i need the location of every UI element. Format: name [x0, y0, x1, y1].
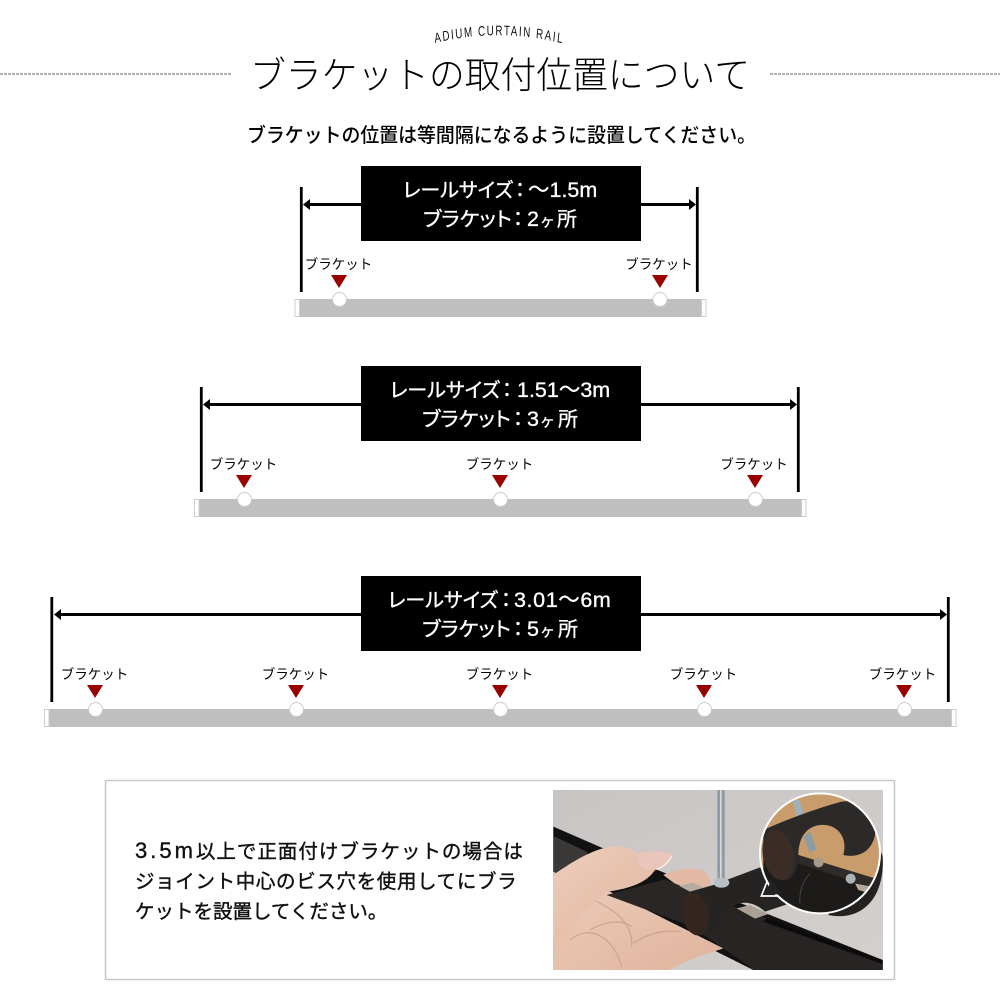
- header: arched English label: ADIUM CURTAIN RAIL: [434, 26, 562, 44]
- note text: ジョイント中心のビス穴を使用してにブラ: [135, 870, 517, 893]
- title: ブラケットの取付位置について: [250, 55, 750, 96]
- label box: レールサイズ: [388, 589, 499, 612]
- bracket markers: ブラケット: [466, 456, 533, 472]
- diagram: rail up to 1.5m: [295, 166, 706, 317]
- label box: 2: [527, 207, 539, 231]
- diagram: rail 3.01 to 6m: [44, 576, 956, 727]
- second finger: [663, 869, 710, 890]
- label box: ヶ: [541, 413, 553, 430]
- label box: 1.51～3m: [517, 378, 610, 402]
- rail bar: [44, 709, 956, 727]
- label box: ブラケット: [422, 407, 511, 431]
- rail bar: [295, 299, 706, 317]
- bracket: [690, 867, 786, 912]
- inset callout: [757, 790, 883, 920]
- label box: ヶ: [541, 213, 553, 230]
- bracket markers: ブラケット: [61, 666, 128, 682]
- panel: joint note: [106, 780, 894, 980]
- label box: 所: [558, 618, 578, 641]
- bracket markers: ブラケット: [625, 256, 693, 272]
- rail clips: [679, 883, 703, 893]
- bracket markers: ブラケット: [305, 256, 372, 272]
- note text: ケットを設置してください。: [135, 901, 387, 923]
- label box: ブラケット: [423, 207, 512, 231]
- bracket markers: ブラケット: [670, 666, 737, 682]
- label box: ：: [513, 619, 523, 641]
- bracket markers: ブラケット: [869, 666, 936, 682]
- bracket markers: ブラケット: [720, 456, 788, 472]
- tube: [607, 879, 883, 972]
- label box: レールサイズ: [390, 379, 501, 402]
- label box: [361, 366, 641, 441]
- bracket markers: ブラケット: [210, 456, 277, 472]
- label box: [361, 166, 641, 241]
- label box: ：: [515, 180, 525, 202]
- subtitle: ブラケットの位置は等間隔になるように設置してください。: [247, 123, 756, 147]
- label box: ～1.5m: [528, 178, 597, 202]
- label box: [361, 576, 641, 651]
- label box: 3.01～6m: [514, 588, 611, 612]
- bracket markers: ブラケット: [262, 666, 329, 682]
- label box: 所: [557, 208, 577, 231]
- label box: ：: [513, 209, 523, 231]
- label box: ：: [501, 590, 511, 612]
- rail bar: [194, 499, 806, 517]
- label box: 3: [527, 407, 539, 431]
- label box: ブラケット: [422, 617, 511, 641]
- note text: 3.5m以上で正面付けブラケットの場合は: [135, 838, 524, 863]
- label box: ：: [513, 409, 523, 431]
- note text: [135, 838, 524, 923]
- photo: hand fixing bracket to rail: [550, 787, 887, 973]
- label box: 5: [527, 617, 539, 641]
- bracket markers: [305, 256, 693, 306]
- bracket markers: ブラケット: [466, 666, 533, 682]
- rail in track: [553, 827, 883, 972]
- label box: ：: [502, 380, 512, 402]
- palm: [553, 891, 724, 970]
- screw: [717, 790, 725, 878]
- bracket markers: [61, 666, 936, 716]
- label box: レールサイズ: [403, 179, 514, 202]
- diagram: rail 1.51 to 3m: [194, 366, 806, 517]
- thumb: [553, 846, 672, 902]
- label box: ヶ: [541, 623, 553, 640]
- bracket markers: [210, 456, 788, 506]
- label box: 所: [558, 408, 578, 431]
